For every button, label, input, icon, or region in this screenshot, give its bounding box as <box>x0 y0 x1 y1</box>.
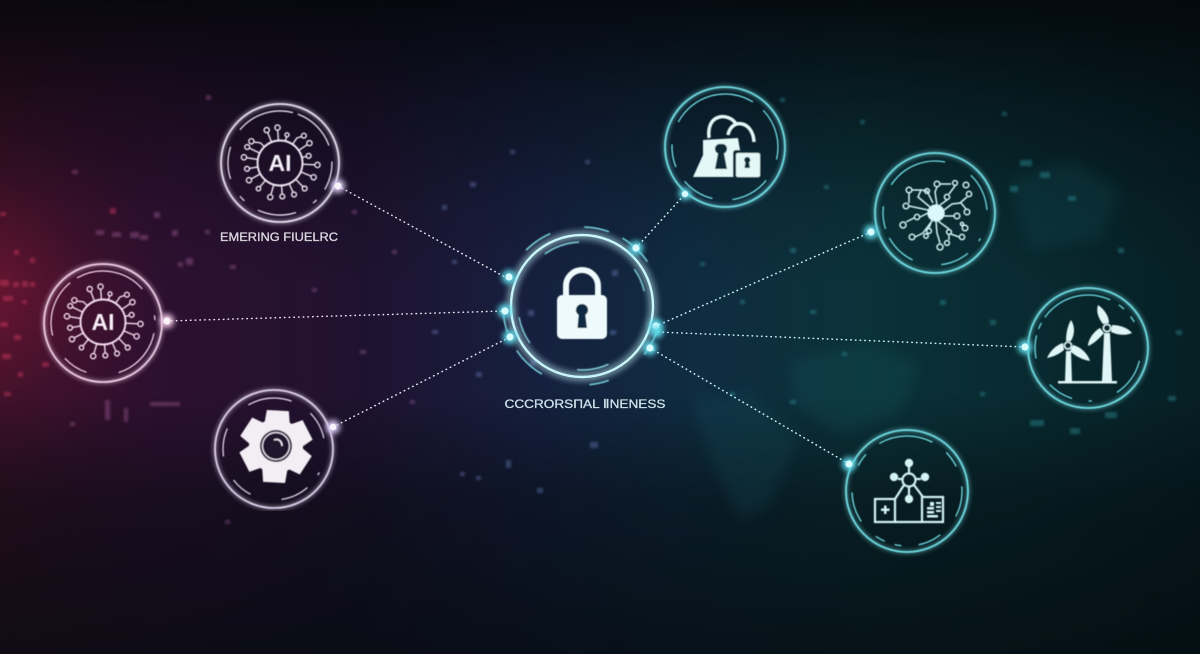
ring <box>660 82 790 212</box>
connector: left AI to hub <box>167 311 505 321</box>
node: neural network <box>862 140 1008 286</box>
connector: network to hub <box>656 232 871 326</box>
icon: padlock <box>557 270 607 339</box>
node: padlocks <box>660 82 790 212</box>
node: wind turbines <box>1013 273 1163 423</box>
ring <box>493 217 671 395</box>
node: gear <box>215 390 333 508</box>
dotted connectors <box>167 186 1025 464</box>
connection point <box>679 188 691 200</box>
connector: wind to hub <box>657 332 1025 347</box>
icon: AI circuit <box>64 284 143 359</box>
connection point <box>1018 340 1032 354</box>
connector: top-left AI to hub <box>338 186 505 277</box>
label: hub: CCCRORSΠAL ⅡNENESS <box>504 397 666 411</box>
connection points <box>498 241 663 355</box>
connector: hospital to hub <box>650 348 849 464</box>
icon: AI circuit: AI <box>92 309 114 335</box>
ring <box>1013 273 1163 423</box>
ring <box>32 252 174 394</box>
node: hospital network <box>832 416 982 566</box>
connection point <box>864 225 878 239</box>
node: central padlock hub <box>493 217 671 395</box>
ring <box>862 140 1008 286</box>
icon: hospital network <box>875 459 943 522</box>
connection points: left nodes <box>160 179 345 434</box>
node: top-left AI <box>213 96 347 230</box>
icon: two padlocks <box>693 117 762 179</box>
connector: gear to hub <box>333 337 510 427</box>
label: emerging: EMERING FIUELRC <box>220 230 338 244</box>
ring <box>215 390 333 508</box>
icon: network <box>900 181 972 250</box>
connector: padlocks to hub <box>636 194 685 248</box>
icon: gear <box>238 410 314 483</box>
icon: AI circuit: AI <box>268 150 292 176</box>
icon: wind turbines <box>1047 305 1132 384</box>
ring <box>213 96 347 230</box>
connection point <box>842 457 856 471</box>
ring <box>832 416 982 566</box>
node: left AI <box>32 252 174 394</box>
background data particles <box>0 95 1182 524</box>
faint world map backdrop <box>690 160 1120 520</box>
